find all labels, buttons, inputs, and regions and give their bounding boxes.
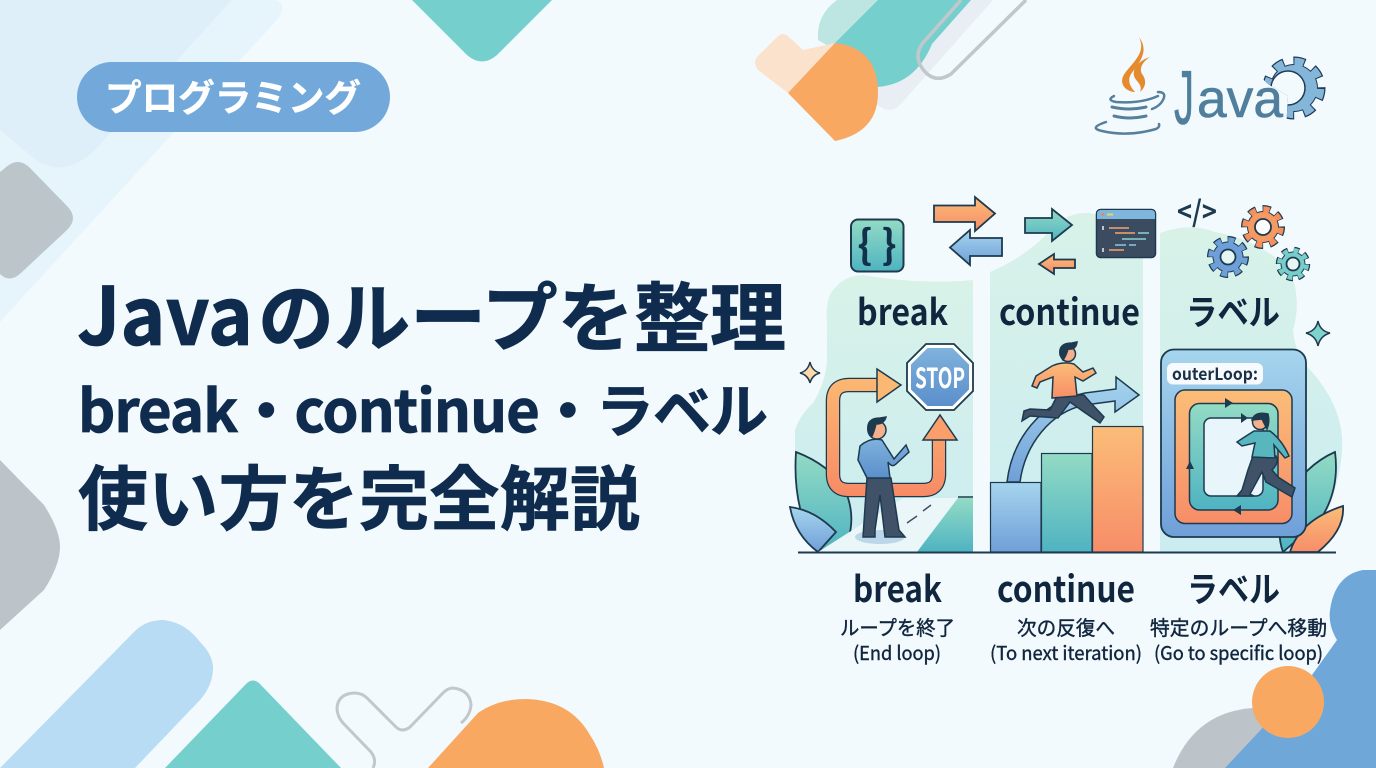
arrow: blue left (950, 230, 1002, 265)
title line 2: break・continue・ラベル (78, 365, 768, 449)
caption: label: (Go to specific loop) (1154, 639, 1323, 666)
caption: continue: (To next iteration) (990, 639, 1142, 666)
caption: continue (990, 561, 1142, 666)
icon: curly braces tile: { } (857, 213, 897, 271)
panel: break scene (790, 344, 973, 552)
title line 1 (77, 253, 786, 369)
ground line (798, 552, 1336, 554)
caption: continue: 次の反復へ (1017, 612, 1115, 641)
person running (1237, 413, 1295, 497)
arrow: orange loop to stop sign (833, 369, 957, 490)
icon: gear (1269, 63, 1319, 113)
inner loop (1204, 418, 1263, 496)
person standing (855, 417, 909, 544)
bar: blue (990, 482, 1041, 552)
middle loop (1190, 404, 1278, 510)
road dashes (907, 505, 931, 523)
caption: label: ラベル (1187, 562, 1280, 613)
arrow: teal right (1025, 209, 1072, 241)
caption: break: (End loop) (853, 639, 941, 666)
decorative shapes: bottom left (0, 620, 604, 768)
title (77, 253, 786, 545)
caption: label: 特定のループへ移動 (1150, 612, 1327, 641)
icon: blue gear (1212, 242, 1244, 272)
sparkle: right (1306, 321, 1330, 346)
stop sign: STOP (915, 357, 965, 397)
bar: green (1042, 454, 1092, 552)
title line 3: 使い方を完全解説 (78, 444, 640, 545)
road edge field (917, 498, 973, 552)
Java wordmark: J (1174, 56, 1194, 141)
person jumping (1022, 342, 1104, 423)
captions (840, 561, 1327, 666)
plant right (1279, 452, 1343, 552)
icon: code window (1096, 210, 1156, 258)
heading: continue: continue (999, 284, 1140, 336)
bar: orange (1092, 426, 1143, 552)
decorative shape: left grey blob (0, 460, 60, 630)
loop direction arrows (1186, 398, 1248, 515)
arrow: small orange left (1039, 254, 1075, 274)
panel: continue scene (990, 342, 1143, 552)
Java wordmark: ava (1197, 69, 1284, 129)
decorative shape: top teal diamond (412, 0, 552, 62)
title line 1: のループを整理 (258, 258, 786, 367)
category tag (77, 62, 390, 132)
Java logo (1096, 37, 1319, 141)
caption: break (840, 561, 955, 666)
icon: orange gear (1247, 211, 1279, 243)
road edge line (958, 496, 973, 498)
decorative shapes: top left (0, 0, 282, 322)
outer loop (1175, 390, 1292, 524)
heading: break: break (857, 284, 948, 336)
outer frame (1161, 350, 1306, 537)
illustration backdrop panels (795, 213, 1342, 552)
column headings (857, 284, 1280, 336)
road (818, 498, 958, 552)
outerLoop label: outerLoop: (1172, 361, 1258, 385)
caption: continue: continue (997, 561, 1135, 613)
caption: label (1150, 562, 1327, 666)
plant left (790, 452, 851, 552)
decorative shapes: top centre-right (755, 0, 1026, 141)
icon: teal gear (1280, 252, 1306, 276)
sparkle: left (800, 362, 820, 383)
arrow: orange right (934, 197, 995, 231)
heading: label: ラベル (1186, 285, 1280, 336)
panel: label scene (1161, 350, 1343, 552)
icon: coffee cup lines (1096, 92, 1164, 134)
decorative shapes: bottom right (1173, 570, 1376, 768)
arrow: arc jump (1007, 377, 1139, 482)
icon: coffee cup steam (1122, 37, 1150, 92)
caption: break: ループを終了 (840, 612, 955, 641)
Java wordmark (1174, 56, 1284, 141)
category tag: プログラミング (105, 68, 361, 122)
stop sign (907, 344, 973, 410)
caption: break: break (853, 561, 942, 613)
title line 1: Java (77, 253, 253, 369)
icon: html tag symbol: </> (1177, 189, 1217, 231)
